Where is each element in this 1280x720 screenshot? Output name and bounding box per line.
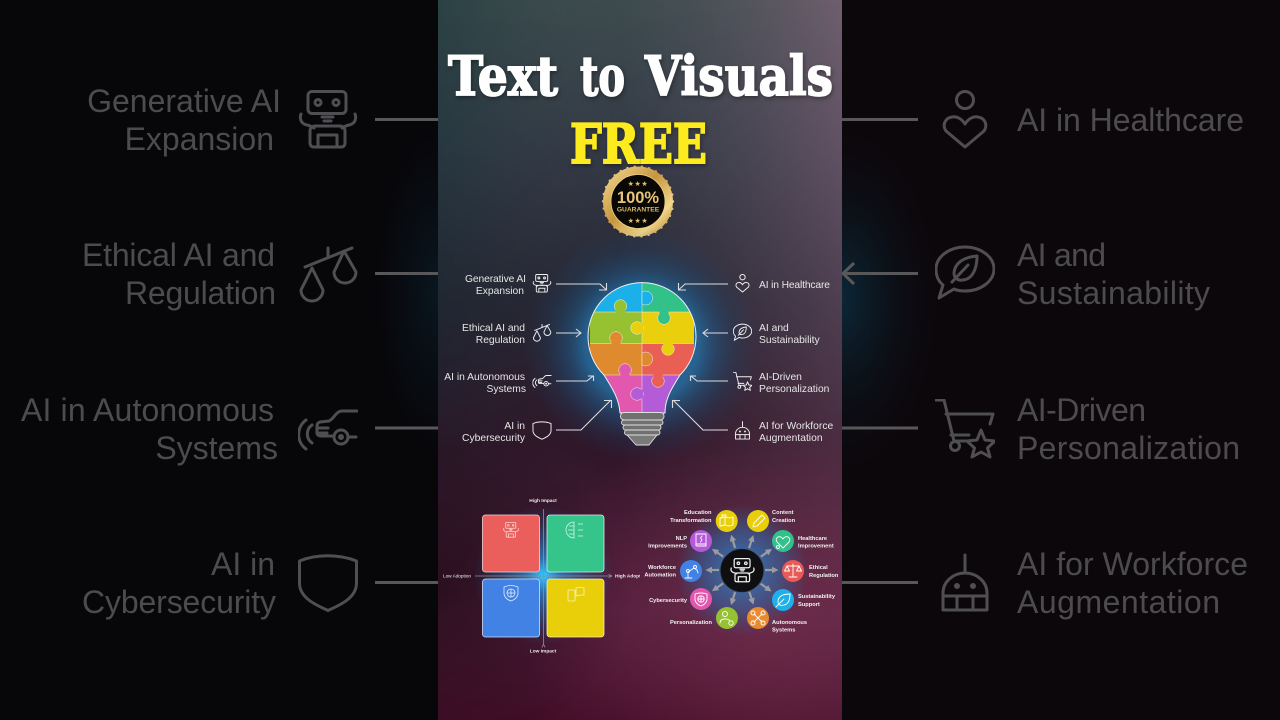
icon: globe shield (504, 586, 518, 601)
node: Ethical Regulation (782, 560, 804, 582)
label: Education Transformation: Transformation (670, 518, 712, 524)
label: AI in Autonomous Systems (21, 392, 278, 466)
label: AI for Workforce Augmentation: Augmentation (1017, 584, 1220, 620)
label: Generative AI Expansion (87, 83, 281, 157)
label: Healthcare Improvement: Improvement (798, 544, 834, 550)
label: AI-Driven Personalization (1017, 392, 1240, 466)
label: AI-Driven Personalization: Personalization (759, 384, 830, 395)
label: AI and Sustainability: AI and (759, 323, 789, 334)
label: Ethical AI and Regulation: Regulation (125, 275, 276, 311)
label: Ethical Regulation (809, 565, 839, 579)
label: Autonomous Systems: Autonomous (772, 620, 807, 626)
label: Content Creation: Content (772, 510, 794, 516)
arrow (672, 400, 728, 430)
label: Content Creation: Creation (772, 518, 796, 524)
label: Ethical AI and Regulation (82, 237, 276, 311)
quadrant: blue (482, 579, 540, 637)
node: Education Transformation (716, 510, 738, 532)
label: Generative AI Expansion: Expansion (476, 286, 524, 297)
label: AI in Autonomous Systems: Systems (487, 384, 526, 395)
label: Autonomous Systems (772, 620, 807, 634)
label: AI in Cybersecurity: Cybersecurity (82, 584, 276, 620)
label: Education Transformation (670, 510, 712, 524)
label: AI and Sustainability: Sustainability (759, 335, 821, 346)
label: Ethical Regulation: Regulation (809, 573, 839, 579)
hub circle (720, 549, 764, 592)
icon: scales (533, 324, 551, 341)
hub labels (644, 510, 839, 634)
label: Ethical AI and Regulation: Ethical AI and (82, 237, 275, 273)
label: Generative AI Expansion: Generative AI (465, 274, 526, 285)
label: AI in Cybersecurity (82, 546, 276, 620)
icon: cart star (936, 400, 995, 457)
icon: workforce robot (736, 422, 749, 439)
label: Workforce Automation (644, 565, 677, 578)
label: AI and Sustainability: Sustainability (1017, 275, 1210, 311)
label: Healthcare Improvement (798, 536, 834, 550)
connector line (842, 581, 918, 584)
label: AI and Sustainability (759, 323, 821, 346)
right side panel: enlarged labels and icons (842, 92, 1248, 620)
connector line (375, 118, 438, 121)
arrow (690, 376, 728, 381)
label: NLP Improvements: Improvements (648, 544, 687, 550)
label: AI for Workforce Augmentation (1017, 546, 1248, 620)
label: AI for Workforce Augmentation: Augmentation (759, 433, 823, 444)
axis label: High Impact: High Impact (529, 498, 557, 504)
quadrant: green (547, 515, 604, 572)
AI hub diagram (644, 504, 839, 636)
label: AI in Autonomous Systems: Systems (155, 430, 278, 466)
axis label: Low Adoption: Low Adoption (443, 574, 471, 580)
label: Education Transformation: Education (684, 510, 712, 516)
label: AI in Healthcare: AI in Healthcare (759, 280, 830, 291)
icon: cart star (733, 372, 752, 390)
bulb diagram right labels (672, 274, 833, 444)
arrow (556, 400, 612, 430)
connector line (842, 118, 918, 121)
label: Workforce Automation: Automation (644, 572, 677, 578)
label: AI in Cybersecurity: Cybersecurity (462, 433, 526, 444)
icon: robot (533, 274, 551, 292)
icon: speech leaf (733, 324, 752, 340)
label: Ethical AI and Regulation: Ethical AI and (462, 323, 525, 334)
label: AI-Driven Personalization: Personalization (1017, 430, 1240, 466)
badge: 100% guarantee: 100% (617, 189, 659, 207)
label: AI and Sustainability: AI and (1017, 237, 1106, 273)
center panel background (438, 0, 842, 720)
quadrant: red (482, 515, 540, 572)
bulb glow (524, 227, 760, 463)
title: Text (448, 44, 558, 108)
label: AI in Autonomous Systems: AI in Autonomous (444, 372, 525, 383)
icon: phone and map (568, 587, 584, 601)
label: Ethical Regulation: Ethical (809, 565, 828, 571)
label: Ethical AI and Regulation (462, 323, 525, 346)
arrow (678, 283, 728, 290)
title: Visuals (644, 44, 833, 108)
title (448, 44, 833, 108)
label: Content Creation (772, 510, 796, 524)
icon: robot (504, 522, 518, 537)
icon: scales (301, 248, 356, 301)
label: AI in Autonomous Systems (444, 372, 526, 395)
node: Personalization (716, 607, 738, 629)
label: Generative AI Expansion: Expansion (125, 121, 274, 157)
icon: person heart (736, 274, 749, 292)
connector line (375, 581, 438, 584)
arrow (556, 283, 606, 290)
label: Generative AI Expansion (465, 274, 526, 297)
label: Ethical AI and Regulation: Regulation (476, 335, 525, 346)
quadrant: yellow (547, 579, 604, 637)
label: Generative AI Expansion: Generative AI (87, 83, 281, 119)
label: AI in Autonomous Systems: AI in Autonomous (21, 392, 274, 428)
arrow (703, 329, 728, 337)
icon: autonomous car (299, 411, 357, 449)
label: Cybersecurity: Cybersecurity (649, 598, 688, 604)
label: AI in Cybersecurity: AI in (211, 546, 275, 582)
node: Healthcare Improvement (772, 530, 794, 552)
hub icon: robot (731, 559, 754, 582)
connector line (375, 272, 438, 275)
label: AI in Healthcare: AI in Healthcare (1017, 102, 1244, 138)
connector line (842, 426, 918, 430)
icon: brain circuit (566, 522, 583, 538)
badge: 100% guarantee: ★★★ (628, 217, 648, 225)
label: AI for Workforce Augmentation (759, 421, 833, 444)
light bulb puzzle (588, 280, 696, 445)
label: AI-Driven Personalization (759, 372, 830, 395)
arrow (556, 376, 594, 381)
icon: person heart (944, 92, 986, 147)
label: AI in Cybersecurity (462, 421, 526, 444)
label: AI for Workforce Augmentation: AI for Workforce (1017, 546, 1248, 582)
badge: 100% guarantee: ★★★ (628, 180, 648, 188)
label: AI and Sustainability (1017, 237, 1210, 311)
bulb diagram left labels (444, 274, 612, 444)
node: Sustainability Support (772, 589, 794, 611)
label: Workforce Automation: Workforce (648, 565, 676, 571)
subtitle: FREE: FREE (570, 112, 707, 176)
label: Sustainability Support: Sustainability (798, 594, 836, 600)
label: NLP Improvements: NLP (676, 536, 687, 542)
label: AI in Cybersecurity: AI in (504, 421, 525, 432)
axis arrows (475, 509, 611, 645)
badge: 100% guarantee (603, 166, 673, 236)
badge: 100% guarantee: GUARANTEE (617, 206, 660, 214)
icon: speech leaf (936, 247, 994, 298)
label: AI-Driven Personalization: AI-Driven (759, 372, 802, 383)
label: Healthcare Improvement: Healthcare (798, 536, 827, 542)
label: AI for Workforce Augmentation: AI for Workforce (759, 421, 833, 432)
axis label: High Adoption: High Adoption (615, 574, 648, 580)
label: Personalization: Personalization (670, 620, 713, 626)
axis label: Low Impact: Low Impact (530, 648, 557, 654)
arrow (556, 329, 581, 337)
node: Content Creation (747, 510, 769, 532)
label: NLP Improvements (648, 536, 687, 550)
quadrant matrix (443, 498, 648, 654)
icon: workforce robot (943, 555, 987, 610)
label: Sustainability Support: Support (798, 602, 820, 608)
label: Sustainability Support (798, 594, 836, 608)
node: Workforce Automation (680, 560, 702, 582)
icon: shield (300, 556, 356, 610)
icon: car (533, 375, 551, 388)
left side panel: enlarged labels and icons (21, 83, 438, 620)
label: AI-Driven Personalization: AI-Driven (1017, 392, 1146, 428)
node: Cybersecurity (690, 588, 712, 610)
title: to (580, 44, 625, 108)
arrow pointing to bulb (843, 263, 918, 284)
icon: shield (533, 422, 551, 439)
radial arrows (711, 540, 773, 600)
node: NLP Improvements (690, 530, 712, 552)
bulb screw base (620, 412, 664, 445)
icon: robot (300, 92, 356, 147)
label: Autonomous Systems: Systems (772, 628, 795, 634)
node: Autonomous Systems (747, 607, 769, 629)
connector line (375, 426, 438, 430)
